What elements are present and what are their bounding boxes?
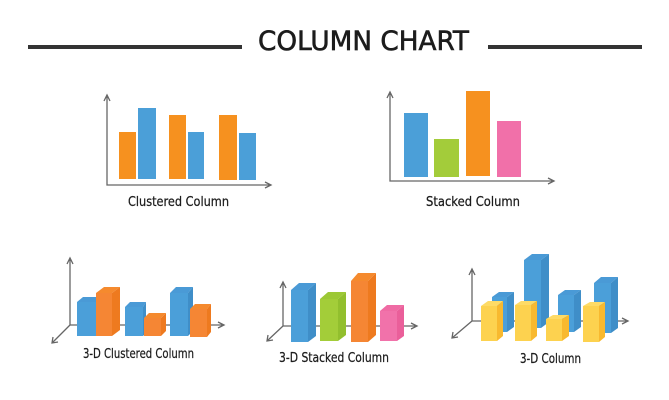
panel: stacked column [387,91,554,210]
bars [77,287,211,337]
panel: 3-D column [452,254,628,367]
panel: 3-D stacked column [267,273,417,366]
bars [119,108,256,180]
axes [387,92,554,184]
bars [291,273,404,342]
back row bars [492,254,618,333]
label: 3-D Stacked Column [279,350,389,366]
label: Stacked Column [426,194,520,210]
panel: 3-D clustered column [52,258,224,362]
axes [267,282,417,341]
axes [452,269,628,338]
bars [404,91,521,177]
panel: clustered column [104,95,271,210]
front row bars [481,301,605,342]
title: COLUMN CHART [258,26,469,57]
label: 3-D Clustered Column [83,346,194,362]
axes [104,95,271,188]
axes [52,258,224,343]
label: 3-D Column [520,351,581,367]
label: Clustered Column [128,194,229,210]
title [28,26,642,57]
